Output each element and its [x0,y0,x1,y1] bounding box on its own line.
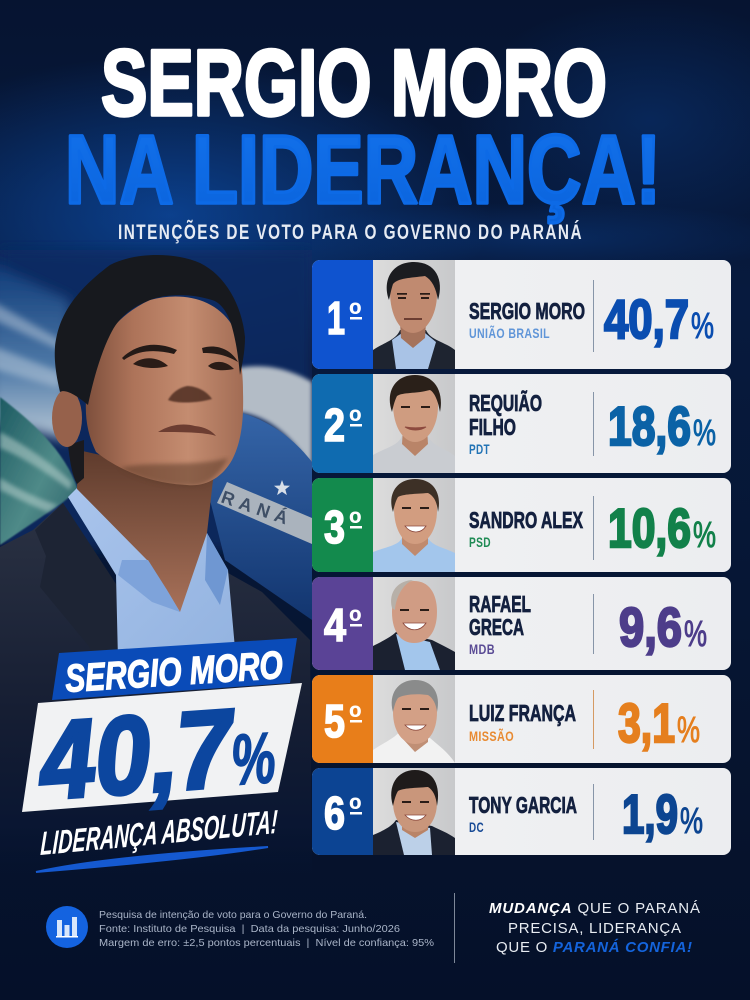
star [274,480,290,495]
mouth [158,424,216,436]
portrait: Sergio Moro [0,255,312,880]
value: 9,6 [619,596,682,658]
rank number: 1 [327,292,345,344]
rank ordinal: º [349,603,361,641]
name: RAFAEL [469,591,531,617]
photo [373,577,455,670]
rank number: 4 [324,599,346,651]
nape [68,440,84,484]
slogan: LIDERANÇA ABSOLUTA! [40,804,278,863]
party: PSD [469,534,491,550]
rank [312,260,373,369]
value: % [677,709,700,750]
value: % [693,514,716,555]
footer divider [454,893,455,963]
badge white panel [22,683,302,812]
name: TONY GARCIA [469,792,577,818]
value: % [684,613,707,654]
card [312,478,731,572]
value: 10,6 [608,497,691,559]
rank [312,478,373,572]
value: % [680,800,703,841]
banner lettering: RANÁ [219,486,291,528]
name: SANDRO ALEX [469,507,583,533]
collar shade [118,560,180,612]
candidate 5 [312,675,731,763]
subtitle: INTENÇÕES DE VOTO PARA O GOVERNO DO PARANÁ [118,220,583,244]
value: 18,6 [608,395,691,457]
value: 40,7 [604,288,689,350]
name: GRECA [469,614,524,640]
card [312,374,731,473]
rank number: 2 [324,399,345,451]
name [469,591,531,640]
rank [312,577,373,670]
value: % [691,305,714,346]
brows [122,345,238,362]
title [65,30,661,224]
closing slogan [489,900,700,956]
methodology note [99,909,434,949]
divider [593,784,594,840]
rank ordinal: º [349,403,361,441]
rank [312,374,373,473]
candidate 2 [312,374,731,473]
rank ordinal: º [349,699,361,737]
closing slogan: QUE O PARANÁ CONFIA! [496,939,692,956]
flag backdrop [0,250,312,620]
photo [373,768,455,855]
ear [52,389,82,447]
card [312,768,731,855]
divider [593,690,594,749]
name: REQUIÃO [469,389,542,416]
hair [55,255,245,405]
divider [593,594,594,654]
badge name: SERGIO MORO [64,644,284,701]
badge name strip [52,638,297,700]
badge value: 40,7 [34,687,241,823]
rank [312,768,373,855]
photo [373,478,455,572]
rank ordinal: º [349,296,361,334]
candidate 3 [312,478,731,572]
photo [373,260,455,369]
rank number: 3 [324,501,345,553]
beard shadow [120,458,228,486]
eyes [133,358,234,370]
name [469,389,542,440]
candidate 4 [312,577,731,670]
badge percent: % [229,718,278,801]
rank ordinal: º [349,505,361,543]
name: LUIZ FRANÇA [469,700,576,726]
candidate 1 [312,260,731,369]
candidate 6 [312,768,731,855]
divider [593,496,594,560]
party: UNIÃO BRASIL [469,324,550,341]
rank number: 5 [324,695,345,747]
card [312,260,731,369]
jacket [0,503,312,880]
photo [373,675,455,763]
photo [373,374,455,473]
lapel [35,503,140,700]
nose [168,386,212,403]
party: MDB [469,641,495,657]
value: 3,1 [618,692,675,754]
face [86,297,243,485]
card [312,675,731,763]
rank ordinal: º [349,791,361,829]
badge: Sergio Moro 40,7% [22,638,302,872]
rank number: 6 [324,787,345,839]
party: PDT [469,441,490,457]
closing slogan: MUDANÇA QUE O PARANÁ [489,900,700,917]
brush stroke [36,847,268,872]
name: FILHO [469,414,516,440]
card [312,577,731,670]
divider [593,392,594,456]
neck [77,450,213,612]
name: SERGIO MORO [469,298,585,324]
party: DC [469,819,484,835]
closing slogan: PRECISA, LIDERANÇA [508,920,681,937]
shirt [68,488,236,660]
icon: bar chart [46,906,88,948]
methodology note: Pesquisa de intenção de voto para o Governo do Paraná. [99,909,367,921]
methodology note: Margem de erro: ±2,5 pontos percentuais | Nível de confiança: 95% [99,937,434,949]
value: % [693,412,716,453]
divider [593,280,594,352]
rank [312,675,373,763]
party: MISSÃO [469,727,514,744]
methodology note: Fonte: Instituto de Pesquisa | Data da pesquisa: Junho/2026 [99,923,400,935]
value: 1,9 [622,783,678,845]
